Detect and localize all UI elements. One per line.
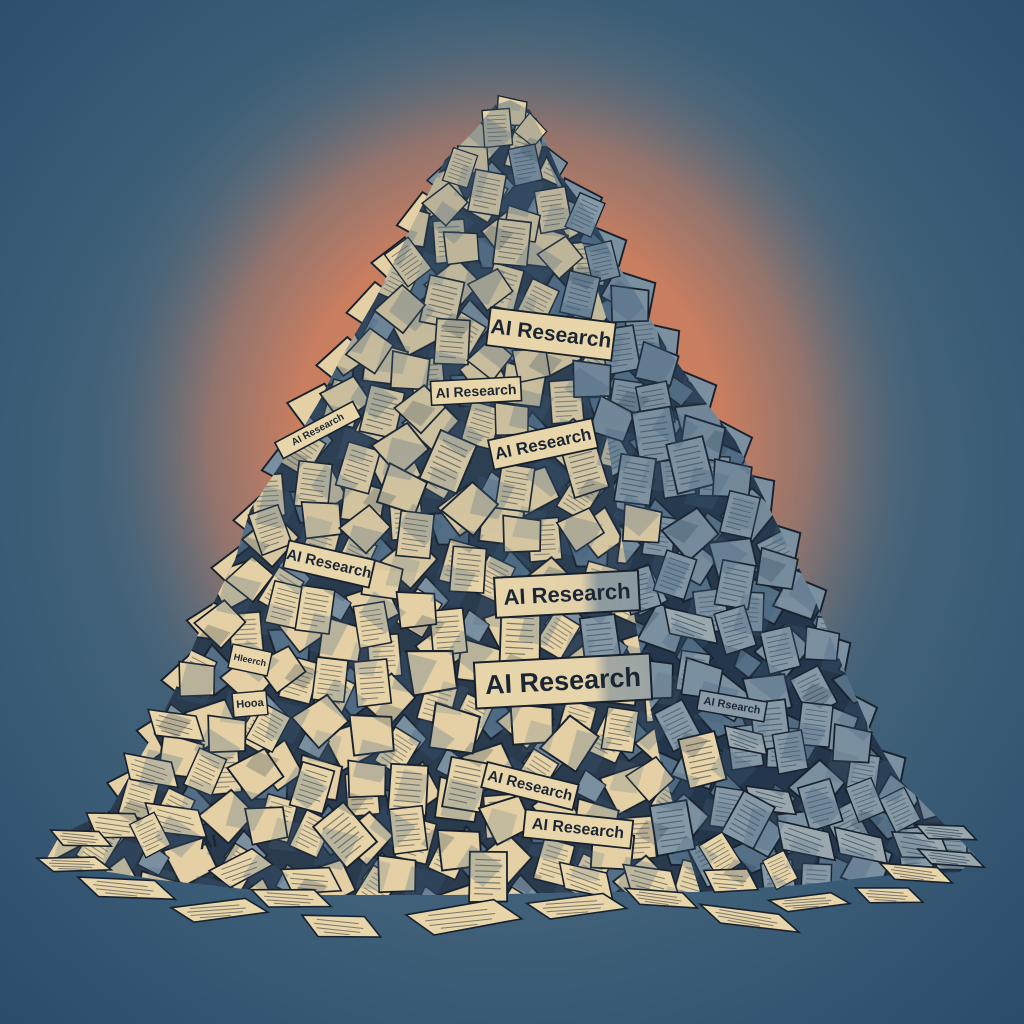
scattered papers at the base: [37, 821, 986, 943]
banner: AI Research second: [430, 377, 522, 405]
banner: AI Research second: AI Research: [435, 381, 517, 401]
paper pile: [45, 90, 975, 905]
pile edge shards: [105, 109, 915, 820]
banner: AI Research third: [488, 418, 598, 470]
banner: AI Research smudged left: [275, 401, 361, 459]
banner: AI Research shaded right: AI Rsearch: [703, 695, 762, 717]
banner: AI Research third: AI Research: [493, 424, 593, 464]
banner: AI Research smudged left: AI Research: [290, 412, 346, 448]
banner: AI Research large middle: [494, 570, 640, 618]
banner: AI Research left: AI Research: [285, 546, 373, 582]
small label: Hooa: Hooa: [236, 697, 265, 711]
middle section papers: [222, 374, 847, 712]
banner: AI Research shaded right: [697, 690, 767, 722]
shadow patches across the pile: [45, 100, 975, 895]
banner: AI Research largest: AI Research: [484, 662, 642, 700]
lower section papers: [83, 596, 954, 905]
banner: AI Research top: [486, 307, 616, 361]
top section papers: [341, 90, 687, 409]
upper pile shade: [235, 100, 815, 600]
banner: AI Research lowest: [523, 809, 633, 849]
banner: AI Research top: AI Research: [489, 315, 613, 353]
banner: AI Research lowest: AI Research: [531, 816, 625, 842]
small label: Hooa: [232, 691, 268, 717]
banner: AI Research lower: AI Research: [486, 767, 574, 805]
banner: AI Research large middle: AI Research: [503, 578, 631, 610]
small label: Research: Hleerch: [233, 652, 267, 668]
pile body: shaded right side: [45, 100, 975, 895]
banner: AI Research largest: [474, 653, 652, 709]
small label: AI: AI: [197, 831, 219, 853]
small label: Research: [228, 644, 272, 676]
pile body: lit left side: [45, 100, 700, 895]
